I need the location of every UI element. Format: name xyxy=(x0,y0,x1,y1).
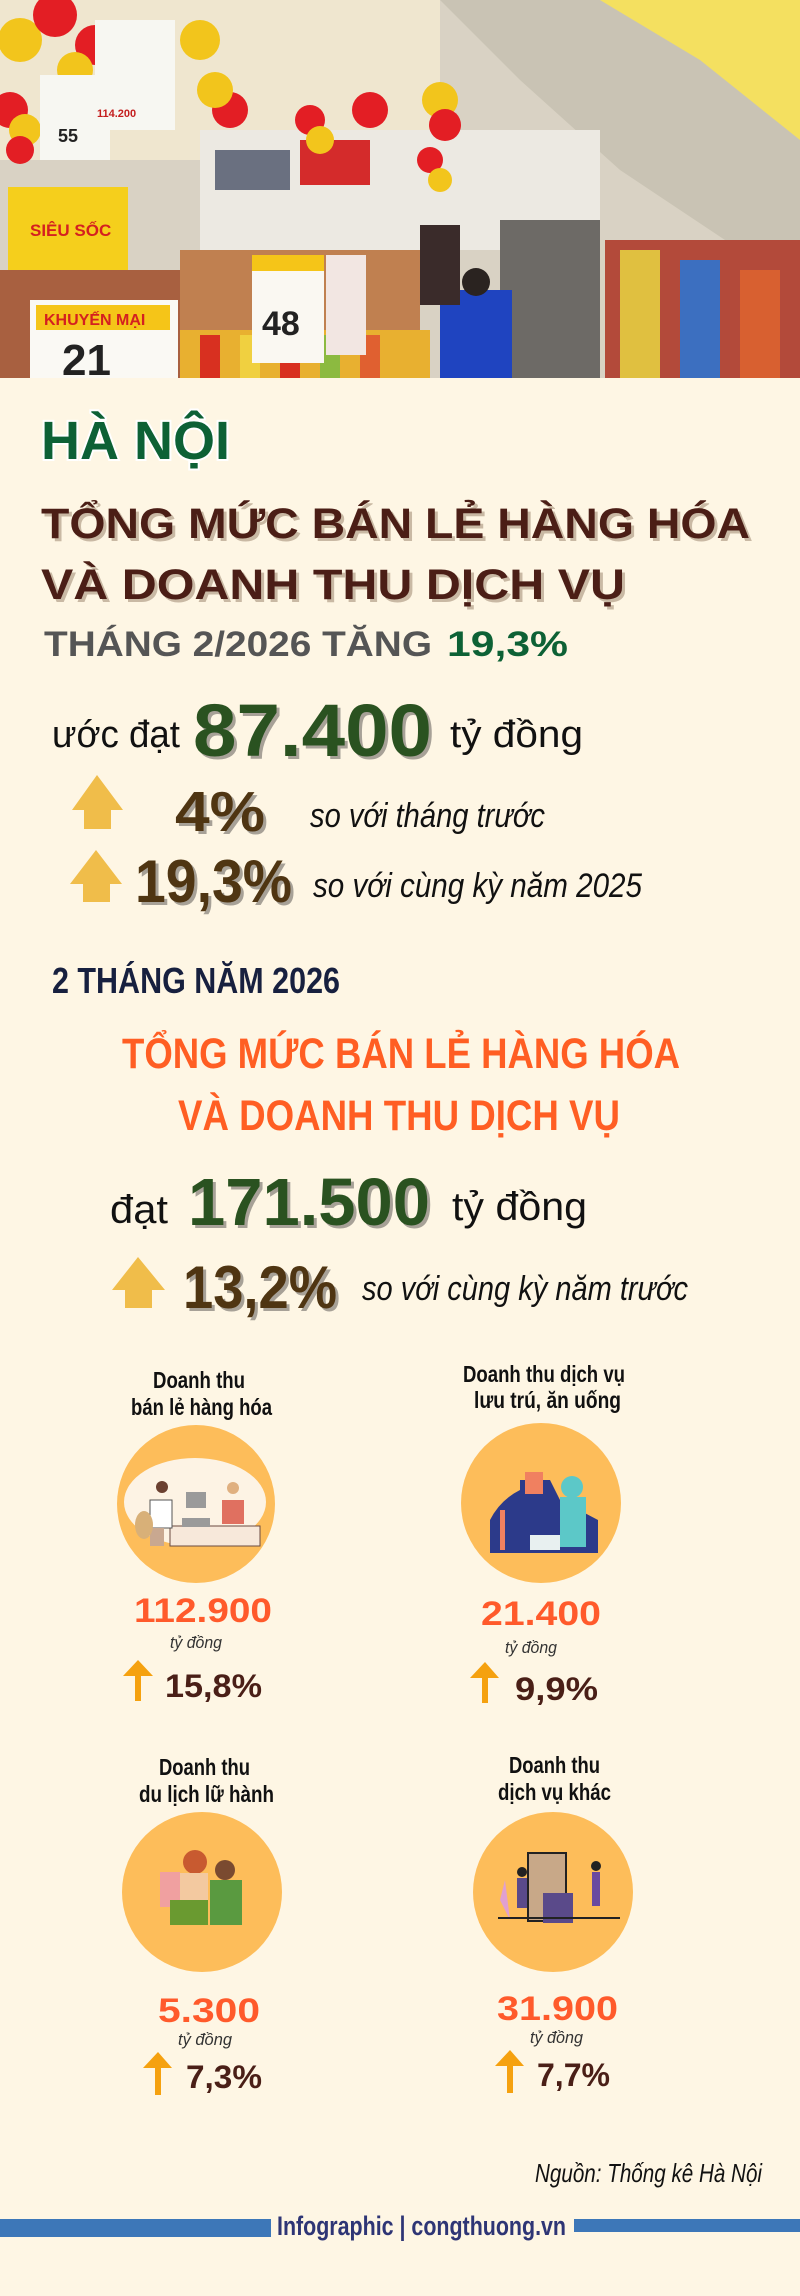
panel: doanh thu du lịch lữ hành: Doanh thu xyxy=(159,1754,250,1780)
stat row: 4% so với tháng trước: 4% xyxy=(175,780,265,844)
stat: ước đạt 87.400 tỷ đồng: ước đạt xyxy=(52,714,180,756)
stat row: 19,3% so với cùng kỳ năm 2025 xyxy=(70,848,642,918)
photo: supermarket header xyxy=(0,0,800,385)
panel: doanh thu dịch vụ khác: 31.900 xyxy=(497,1990,618,2028)
panel: doanh thu bán lẻ hàng hóa: 15,8% xyxy=(165,1668,262,1704)
panel: doanh thu bán lẻ hàng hóa: tỷ đồng xyxy=(170,1633,223,1652)
subheading: tháng 2/2026 tăng xyxy=(44,624,568,664)
heading: orange title xyxy=(122,1028,680,1140)
icon: up arrow xyxy=(143,2052,172,2095)
panel: doanh thu dịch vụ khác: tỷ đồng xyxy=(530,2028,584,2047)
panel: doanh thu du lịch lữ hành: du lịch lữ hành xyxy=(139,1781,274,1807)
stat row: 4% so với tháng trước: so với tháng trước xyxy=(310,797,545,835)
stat: ước đạt 87.400 tỷ đồng xyxy=(52,689,583,775)
icon: retail cashier illustration xyxy=(117,1425,275,1583)
panel: doanh thu dịch vụ lưu trú, ăn uống: Doanh thu dịch vụ xyxy=(463,1361,625,1387)
stat: đạt 171.500 tỷ đồng: đạt xyxy=(110,1188,168,1232)
panel: doanh thu du lịch lữ hành: 7,3% xyxy=(186,2059,262,2095)
panel: doanh thu du lịch lữ hành: 5.300 xyxy=(158,1992,260,2030)
subheading: tháng 2/2026 tăng: 19,3% xyxy=(447,625,568,664)
stat row: 19,3% so với cùng kỳ năm 2025: 19,3% xyxy=(135,848,292,915)
icon: service illustration xyxy=(473,1812,633,1972)
panel: doanh thu dịch vụ lưu trú, ăn uống: 9,9% xyxy=(515,1671,598,1707)
stat: đạt 171.500 tỷ đồng: 171.500 xyxy=(191,1168,433,1243)
photo: supermarket header: 21 xyxy=(62,336,111,385)
heading: main title: VÀ DOANH THU DỊCH VỤ xyxy=(41,561,625,609)
panel: doanh thu dịch vụ khác xyxy=(473,1752,633,2093)
stat row: 13,2% so với cùng kỳ năm trước: 13,2% xyxy=(183,1254,337,1321)
photo: supermarket header: 114.200 xyxy=(97,108,136,120)
panel: doanh thu dịch vụ lưu trú, ăn uống: tỷ đồng xyxy=(505,1638,558,1657)
heading: main title: TỔNG MỨC BÁN LẺ HÀNG HÓA xyxy=(44,501,753,551)
stat row: 13,2% so với cùng kỳ năm trước: 13,2% xyxy=(186,1257,340,1324)
stat row: 4% so với tháng trước: 4% xyxy=(178,783,268,847)
heading: orange title: TỔNG MỨC BÁN LẺ HÀNG HÓA xyxy=(122,1028,680,1078)
subheading: tháng 2/2026 tăng: THÁNG 2/2026 TĂNG xyxy=(44,624,432,664)
stat: ước đạt 87.400 tỷ đồng: 87.400 xyxy=(193,689,432,772)
panel: doanh thu bán lẻ hàng hóa: Doanh thu xyxy=(153,1367,245,1393)
icon: chef illustration xyxy=(461,1423,621,1583)
panel: doanh thu dịch vụ lưu trú, ăn uống: lưu trú, ăn uống xyxy=(474,1387,621,1413)
footer: Infographic | congthuong.vn xyxy=(277,2211,566,2241)
stat: ước đạt 87.400 tỷ đồng: tỷ đồng xyxy=(450,714,583,756)
heading: main title: VÀ DOANH THU DỊCH VỤ xyxy=(44,564,628,612)
stat row: 13,2% so với cùng kỳ năm trước xyxy=(112,1254,688,1324)
title: HÀ NỘI: HÀ NỘI xyxy=(41,410,230,471)
icon: travelers illustration xyxy=(122,1812,282,1972)
panel: doanh thu du lịch lữ hành: tỷ đồng xyxy=(178,2030,233,2049)
stat: đạt 171.500 tỷ đồng: tỷ đồng xyxy=(452,1185,587,1229)
photo: supermarket header: 55 xyxy=(58,126,78,146)
stat row: 19,3% so với cùng kỳ năm 2025: 19,3% xyxy=(138,851,295,918)
stat row: 4% so với tháng trước xyxy=(72,775,545,847)
panel: doanh thu dịch vụ khác: 7,7% xyxy=(537,2057,610,2093)
stat: đạt 171.500 tỷ đồng xyxy=(110,1165,587,1243)
icon: up arrow xyxy=(70,850,122,902)
stat: đạt 171.500 tỷ đồng: 171.500 xyxy=(188,1165,430,1240)
stat row: 19,3% so với cùng kỳ năm 2025: so với cùng kỳ năm 2025 xyxy=(313,867,642,905)
panel: doanh thu dịch vụ khác: Doanh thu xyxy=(509,1752,600,1778)
panel: doanh thu dịch vụ lưu trú, ăn uống xyxy=(461,1361,625,1707)
panel: doanh thu dịch vụ khác: dịch vụ khác xyxy=(498,1779,611,1805)
footer xyxy=(0,2211,800,2241)
stat: ước đạt 87.400 tỷ đồng: 87.400 xyxy=(196,692,435,775)
icon: up arrow xyxy=(72,775,123,829)
heading: main title xyxy=(41,498,753,612)
icon: up arrow xyxy=(123,1660,153,1701)
panel: doanh thu bán lẻ hàng hóa: 112.900 xyxy=(134,1592,272,1630)
panel: doanh thu du lịch lữ hành xyxy=(122,1754,282,2095)
heading: 2 tháng năm 2026: 2 THÁNG NĂM 2026 xyxy=(52,960,340,1001)
panel: doanh thu bán lẻ hàng hóa xyxy=(117,1367,275,1704)
photo: supermarket header: 48 xyxy=(262,305,300,343)
photo: supermarket header: KHUYẾN MẠI xyxy=(44,310,145,329)
photo: supermarket header: SIÊU SỐC xyxy=(30,220,111,240)
icon: up arrow xyxy=(112,1257,165,1308)
icon: up arrow xyxy=(470,1662,499,1703)
icon: up arrow xyxy=(495,2050,524,2093)
panel: doanh thu dịch vụ lưu trú, ăn uống: 21.400 xyxy=(481,1595,601,1633)
stat row: 13,2% so với cùng kỳ năm trước: so với cùng kỳ năm trước xyxy=(362,1270,688,1308)
heading: orange title: VÀ DOANH THU DỊCH VỤ xyxy=(178,1092,620,1140)
heading: main title: TỔNG MỨC BÁN LẺ HÀNG HÓA xyxy=(41,498,750,548)
panel: doanh thu bán lẻ hàng hóa: bán lẻ hàng hóa xyxy=(131,1394,272,1420)
